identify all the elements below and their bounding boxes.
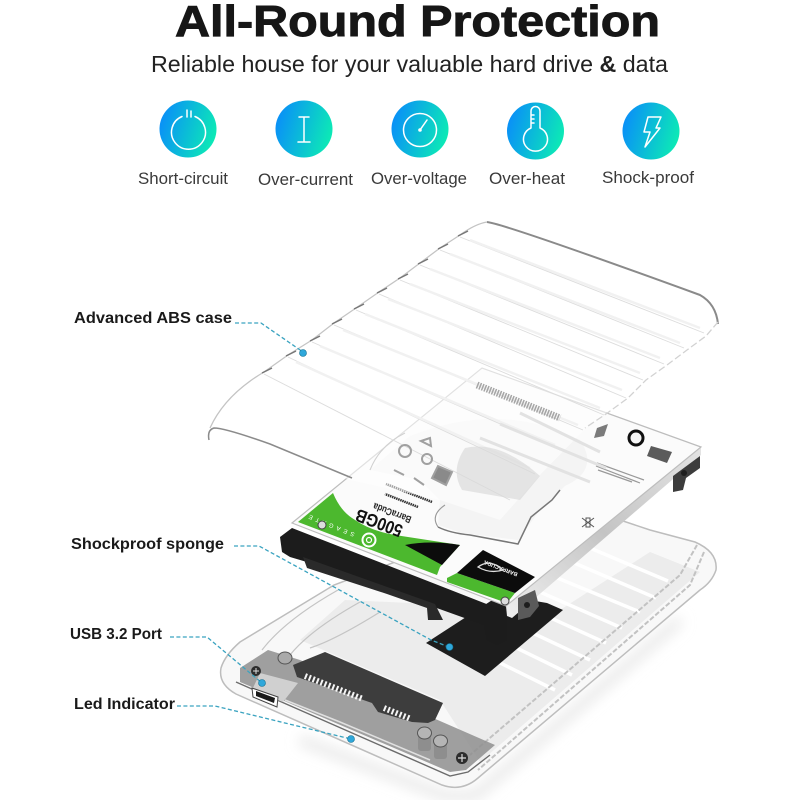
SATA connector bbox=[293, 652, 443, 723]
icon: over-voltage gauge bbox=[392, 100, 448, 158]
drive top plate bbox=[292, 368, 701, 606]
Seagate logo bbox=[362, 534, 376, 546]
icon: over-current bbox=[276, 100, 332, 158]
callout: Advanced ABS case: Advanced ABS case bbox=[74, 310, 232, 327]
icon: over-heat thermometer bbox=[507, 102, 564, 160]
label: Over-voltage: Over-voltage bbox=[371, 169, 467, 188]
capacitors bbox=[278, 652, 448, 759]
USB-C port bbox=[252, 673, 298, 707]
drive silver side bbox=[506, 447, 701, 618]
certification badge bbox=[629, 431, 643, 445]
icon: short-circuit power bbox=[160, 100, 216, 158]
top transparent cover bbox=[209, 222, 718, 520]
rear edge bbox=[487, 222, 718, 324]
bottom case bbox=[221, 500, 716, 796]
drive front bracket bbox=[280, 528, 507, 645]
SATA plug bbox=[303, 557, 443, 620]
rear bracket bbox=[673, 456, 700, 492]
icon row bbox=[138, 100, 694, 189]
barcode text strip bbox=[385, 484, 432, 507]
top cover embossed outline bbox=[370, 419, 587, 540]
subtitle: Reliable house for your valuable hard drive & data bbox=[151, 51, 669, 77]
front edge bbox=[209, 428, 352, 478]
callout: Shockproof sponge: Shockproof sponge bbox=[71, 536, 224, 553]
label: Shock-proof: Shock-proof bbox=[602, 168, 694, 187]
white stripes on case floor bbox=[470, 548, 668, 690]
shockproof sponge bbox=[426, 595, 563, 676]
circuit board bbox=[240, 650, 495, 772]
green label right bbox=[447, 573, 515, 603]
label: Over-current: Over-current bbox=[258, 170, 353, 189]
cover rib overlay near label bbox=[480, 413, 606, 482]
right ribbed edge bbox=[585, 322, 718, 428]
badge emblem bbox=[478, 563, 503, 571]
QR code bbox=[647, 446, 672, 463]
BarraCuda badge: BARRACUDA bbox=[483, 558, 519, 577]
label: Short-circuit: Short-circuit bbox=[138, 169, 228, 188]
screws bbox=[251, 666, 468, 764]
barcode bbox=[477, 385, 560, 418]
head arm reflection bbox=[457, 447, 540, 500]
model text: BarraCuda bbox=[371, 500, 413, 524]
recycling mark bbox=[582, 518, 594, 527]
exploded product illustration bbox=[209, 222, 718, 796]
label text block bbox=[596, 463, 644, 483]
connector pins bbox=[305, 676, 411, 719]
icon: shock-proof lightning bbox=[622, 102, 680, 160]
green label left bbox=[298, 493, 460, 575]
callout: Advanced ABS case bbox=[74, 310, 306, 356]
rib tips bbox=[262, 231, 468, 373]
callout: Shockproof sponge bbox=[71, 536, 453, 650]
label: Over-heat: Over-heat bbox=[489, 169, 565, 188]
callout: Led Indicator bbox=[74, 696, 354, 742]
small code bbox=[594, 424, 608, 438]
left ribbed edge bbox=[210, 222, 487, 428]
callout: Led Indicator: Led Indicator bbox=[74, 696, 175, 713]
ribs bbox=[264, 237, 704, 500]
callout: USB 3.2 Port: USB 3.2 Port bbox=[70, 626, 162, 643]
hard drive bbox=[280, 368, 701, 645]
capacity text: 500GB bbox=[353, 505, 405, 541]
regulatory icons bbox=[394, 438, 452, 485]
callout: USB 3.2 Port bbox=[70, 626, 266, 686]
screw marks bbox=[318, 521, 509, 605]
Seagate wordmark: SEAGATE bbox=[305, 512, 356, 537]
